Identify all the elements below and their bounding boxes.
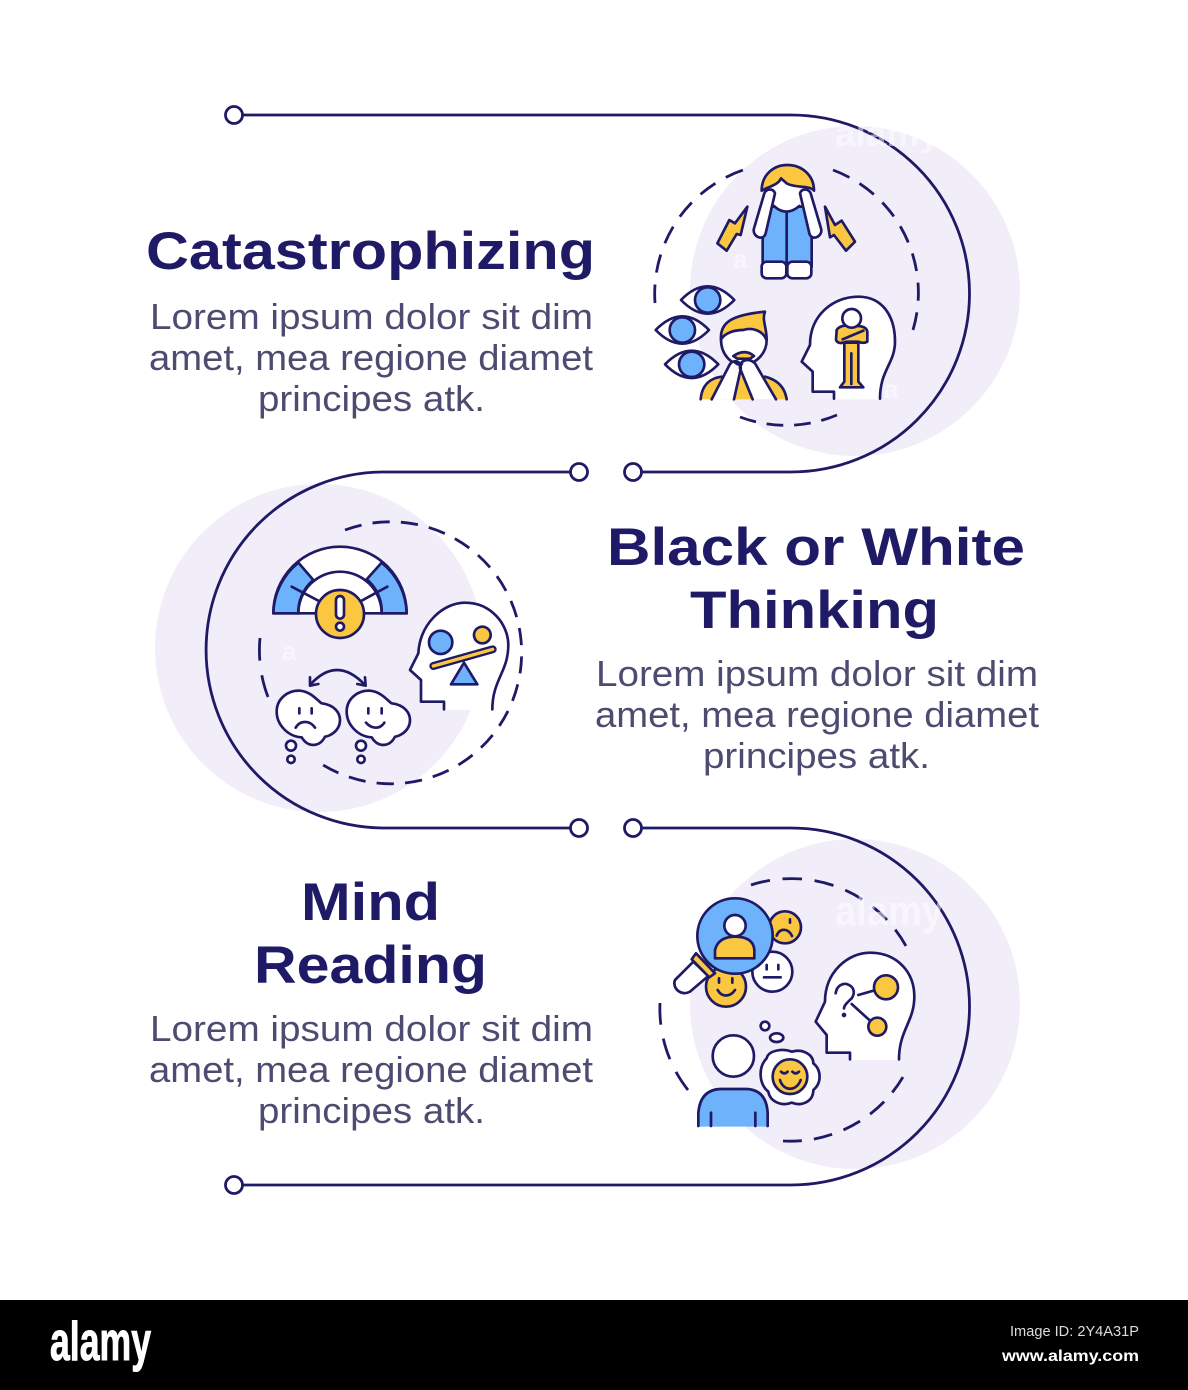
background circle: black or white thinking xyxy=(155,484,483,812)
description: mind reading: principes atk. xyxy=(258,1090,485,1131)
heading: black or white thinking: Thinking xyxy=(690,581,939,640)
icon: neutral face xyxy=(752,952,792,992)
footer url: www.alamy.com xyxy=(1001,1348,1139,1365)
description: black or white thinking xyxy=(595,653,1039,776)
description: mind reading: Lorem ipsum dolor sit dim xyxy=(150,1008,593,1049)
description: mind reading: amet, mea regione diamet xyxy=(149,1049,593,1090)
watermark traces: alamy xyxy=(835,887,944,934)
description: black or white thinking: amet, mea regione diamet xyxy=(595,694,1039,735)
heading: mind reading: Mind xyxy=(301,873,440,932)
footer bar xyxy=(0,1300,1188,1390)
icon: gauge with warning xyxy=(273,547,407,638)
connector line: bottom xyxy=(234,828,970,1185)
background circle: mind reading xyxy=(690,839,1020,1169)
description: black or white thinking: principes atk. xyxy=(703,735,930,776)
background circle: catastrophizing xyxy=(690,126,1020,456)
watermark traces xyxy=(282,113,944,934)
icon: happy face xyxy=(706,967,746,1007)
text block: black or white thinking xyxy=(595,518,1039,776)
icon: head with balance and mood clouds xyxy=(277,603,508,763)
heading: black or white thinking xyxy=(607,518,1025,640)
watermark traces: alamy xyxy=(835,113,940,154)
connector line: middle xyxy=(206,472,579,828)
heading: catastrophizing: Catastrophizing xyxy=(146,222,595,281)
description: black or white thinking: Lorem ipsum dolor sit dim xyxy=(596,653,1038,694)
description: catastrophizing: Lorem ipsum dolor sit dim xyxy=(150,296,593,337)
icon: head with crossed-arm figure xyxy=(802,297,895,399)
description: catastrophizing: principes atk. xyxy=(258,378,485,419)
icon: magnifier with person xyxy=(674,898,773,993)
watermark traces: a xyxy=(282,636,297,666)
description: mind reading xyxy=(149,1008,593,1131)
icon: sad face xyxy=(769,911,801,943)
text block: catastrophizing xyxy=(146,222,595,419)
text block: mind reading xyxy=(149,873,593,1131)
icon group: mind reading xyxy=(674,898,914,1127)
heading: mind reading xyxy=(254,873,487,995)
icon: person thinking of smile xyxy=(698,1022,820,1127)
footer logo: alamy xyxy=(50,1310,151,1372)
description: catastrophizing: amet, mea regione diamet xyxy=(149,337,593,378)
dashed ring: black or white thinking xyxy=(259,522,522,784)
footer image id: Image ID: 2Y4A31P xyxy=(1010,1323,1139,1340)
icon: eyes and man covering face xyxy=(656,286,895,399)
icon: crouching woman with lightning xyxy=(717,165,855,278)
watermark traces: a xyxy=(733,244,748,274)
watermark traces: a xyxy=(884,374,899,404)
heading: black or white thinking: Black or White xyxy=(607,518,1025,577)
dashed ring: mind reading xyxy=(660,879,906,1141)
icon: head with question and nodes xyxy=(816,953,914,1060)
icon: happy cloud xyxy=(347,691,410,763)
arrow: swap between moods xyxy=(310,670,366,686)
description: catastrophizing xyxy=(149,296,593,419)
connector nodes xyxy=(226,106,642,1194)
connector line: top xyxy=(234,115,970,472)
dashed ring: catastrophizing xyxy=(655,170,918,425)
icon: sad cloud xyxy=(277,691,340,763)
heading: mind reading: Reading xyxy=(254,936,487,995)
